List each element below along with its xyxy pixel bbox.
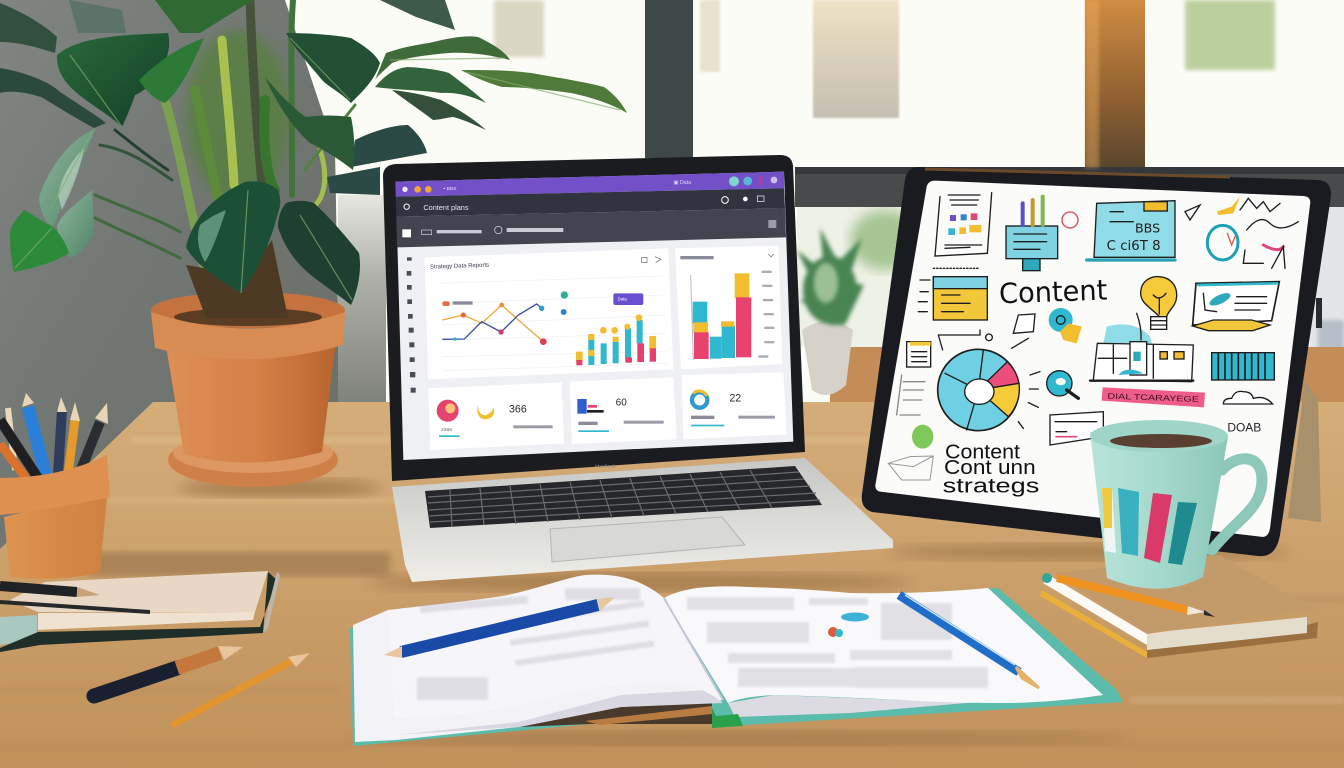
doodle: calendar — [907, 342, 931, 367]
trackpad — [550, 517, 745, 562]
plant — [0, 0, 627, 318]
background: window — [270, 0, 1344, 410]
orange pencil on notebook — [1057, 578, 1215, 617]
doodle: pink label: DIAL TCARAYEGE — [1107, 392, 1199, 404]
left stacked notebooks — [0, 571, 280, 652]
pencil cup with pencils — [0, 393, 110, 579]
doodle: label DOAB: DOAB — [1227, 421, 1261, 435]
left page — [388, 575, 720, 718]
wooden window ledge — [830, 347, 1344, 403]
doodle: monitor with pencils — [1006, 197, 1058, 271]
card: strategy line and bar chart: Data — [618, 297, 627, 302]
doodle: magnifier — [1047, 371, 1078, 398]
screen purple title bar: • BBS — [443, 186, 457, 192]
doodle: desktop monitor with yellow stand — [1193, 282, 1279, 331]
blue pencil on left page — [384, 597, 615, 658]
terracotta saucer — [168, 433, 338, 487]
pencil on desk: orange — [174, 653, 310, 724]
screen dark toolbar: Content plans — [423, 203, 469, 212]
card: metric 366: 366 — [509, 403, 527, 415]
pencil on desk: black — [94, 646, 243, 696]
mug stripes — [1102, 488, 1197, 565]
screen purple title bar: ▣ Data — [673, 180, 691, 186]
grouped bars — [576, 314, 656, 365]
card: metric 22: 22 — [729, 393, 741, 405]
plant trunk — [186, 240, 288, 318]
doodle: striped banner — [1212, 353, 1274, 380]
screen purple title bar — [396, 172, 784, 197]
doodle: target circle — [1062, 212, 1078, 228]
laptop base — [392, 458, 893, 582]
blurred stem mass — [186, 30, 290, 200]
doodle: document with color squares — [935, 193, 992, 256]
tablet side button — [1316, 298, 1322, 328]
doodle: heading Content: Content — [998, 274, 1108, 310]
line chart — [442, 304, 543, 342]
screen sidebar icons — [407, 257, 416, 393]
desk — [0, 402, 1344, 768]
dark object behind desk — [1317, 404, 1344, 457]
laptop lid — [383, 155, 805, 481]
desk shadows — [90, 479, 1290, 745]
shadow beneath spine — [519, 700, 712, 727]
card: metric 22 — [682, 372, 787, 439]
laptop — [383, 155, 893, 582]
terracotta pot — [151, 292, 345, 463]
plant leaf veins — [15, 38, 620, 300]
doodle: text notes — [897, 375, 925, 415]
right page — [664, 586, 1103, 703]
notebook teal cover — [350, 588, 1123, 746]
gutter shadow — [664, 598, 723, 700]
notebook under mug — [1040, 555, 1318, 658]
laptop screen — [396, 172, 793, 469]
card: metric 60 — [570, 377, 677, 444]
doodle: office scene with cyan splash — [1090, 313, 1193, 382]
doodle: colorful ball — [912, 425, 933, 449]
doodle: handwriting Content Cont unn strategs: Cont unn — [944, 457, 1036, 479]
coffee mug — [1090, 420, 1262, 589]
screen dark toolbar — [396, 188, 786, 247]
laptop brand label: MacBook — [595, 463, 616, 469]
doodle: laptop card with handwriting: C ci6T 8 — [1107, 239, 1161, 254]
doodle: handwriting Content Cont unn strategs: strategs — [943, 476, 1039, 498]
mug body — [1090, 432, 1228, 589]
tablet — [862, 167, 1331, 556]
pencil on notebook — [0, 586, 150, 612]
card: strategy line and bar chart — [424, 248, 673, 379]
tablet stand — [1288, 380, 1321, 522]
open notebook on desk — [350, 575, 1123, 746]
doodle: yellow browser window — [918, 268, 987, 320]
card: metric 366 — [428, 382, 564, 450]
card: metric 60: 60 — [616, 398, 627, 409]
doodle: laptop card with handwriting — [1087, 201, 1175, 260]
doodle: handwriting Content Cont unn strategs — [943, 441, 1039, 498]
doodle: small note card — [1050, 412, 1103, 445]
tablet screen — [875, 181, 1310, 537]
doodle: box sketch — [888, 456, 933, 480]
notebook page stacks — [353, 598, 1103, 742]
doodle: handwriting Content Cont unn strategs: Content — [945, 441, 1020, 463]
mug handle — [1212, 459, 1262, 550]
doodle: pie chart — [938, 330, 1040, 431]
card: strategy line and bar chart: Strategy Data Reports — [430, 263, 489, 271]
blue pencil on right page — [899, 595, 1039, 688]
doodle: light bulb — [1141, 277, 1177, 329]
card: stacked bars — [675, 246, 782, 369]
succulent plant in white pot — [797, 228, 864, 395]
doodle: cloud — [1223, 391, 1273, 404]
doodle: clock and squiggle — [1185, 197, 1298, 268]
plant leaves — [0, 0, 627, 305]
desk wood grain — [0, 440, 1344, 745]
window frames — [645, 0, 1344, 207]
doodle: laptop card with handwriting: BBS — [1135, 221, 1160, 236]
plant stems — [95, 0, 355, 270]
background: wall — [0, 0, 386, 560]
doodle: ribbon badge — [1013, 308, 1082, 343]
green bookmark clip — [712, 708, 743, 728]
card: metric 366: 2388 — [441, 427, 452, 433]
coffee surface — [1110, 434, 1212, 448]
keyboard — [425, 466, 822, 528]
doodle: pink label — [1102, 387, 1205, 407]
